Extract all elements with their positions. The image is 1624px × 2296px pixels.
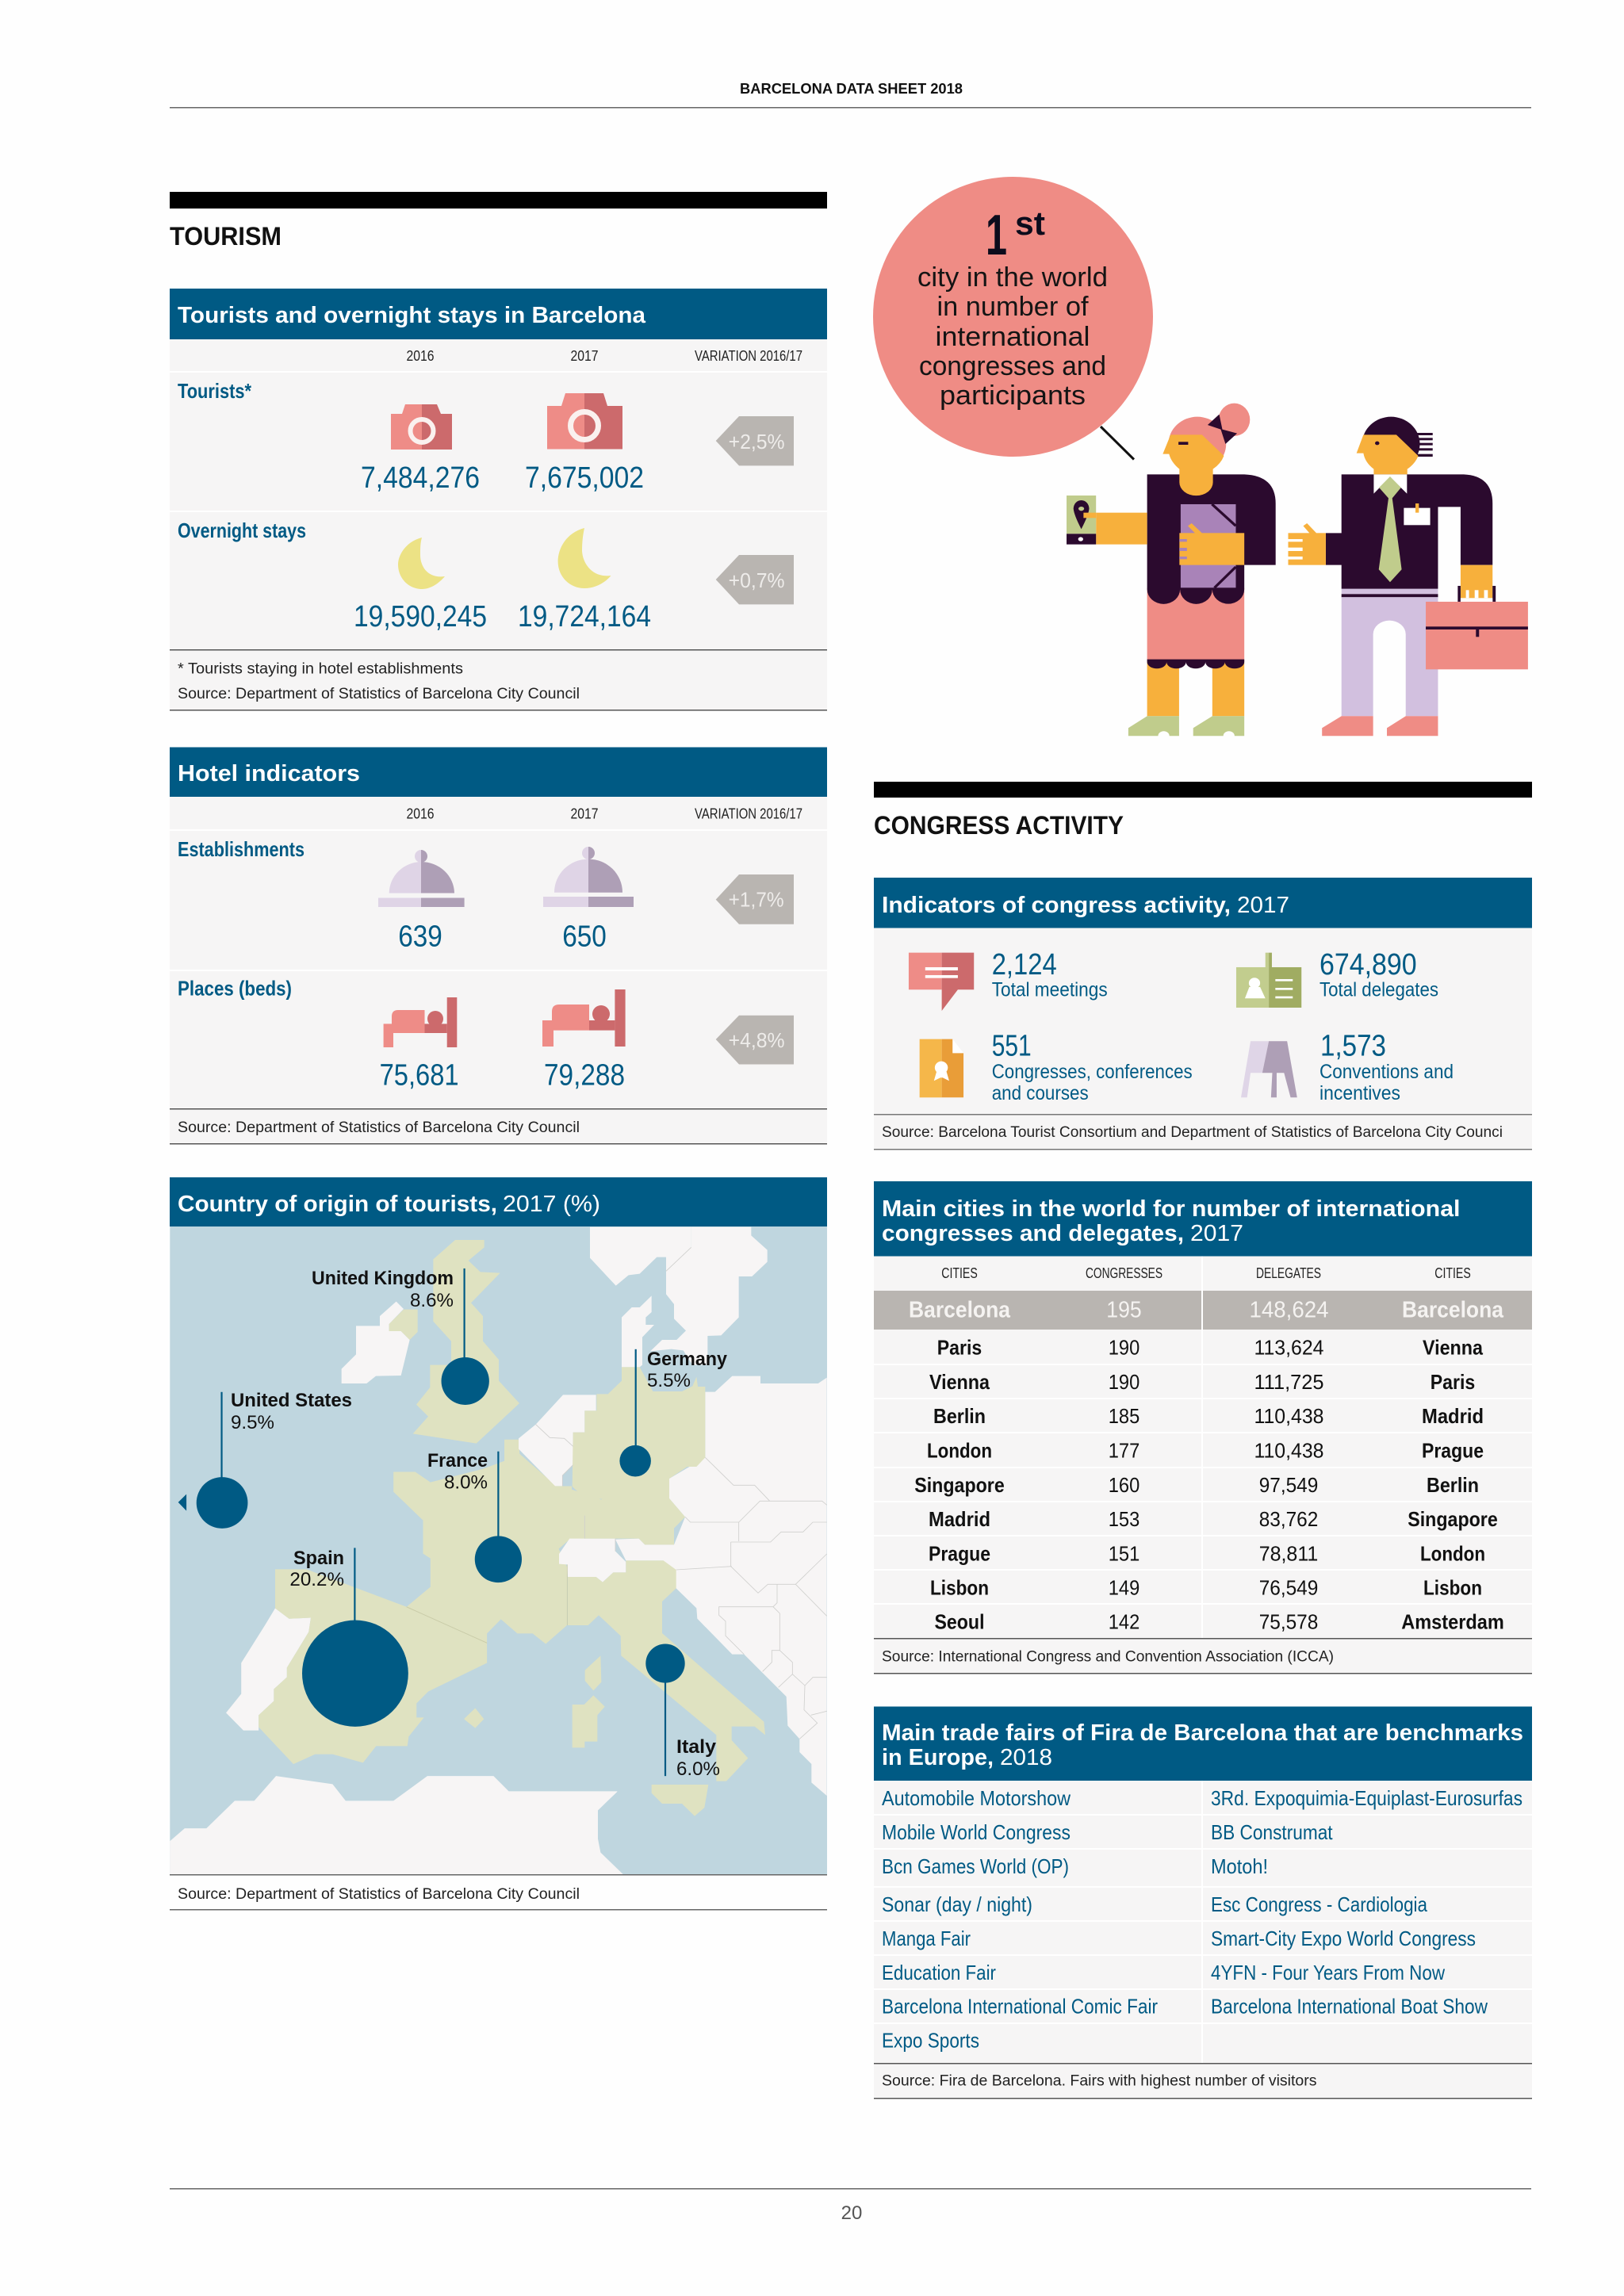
trade fair list: left column: Mobile World Congress xyxy=(882,1820,1071,1844)
label: united kingdom: 8.6% xyxy=(410,1290,454,1311)
callout: 1st city in the world: in number of xyxy=(937,292,1089,322)
icon: document xyxy=(920,1039,963,1097)
marker: united kingdom xyxy=(442,1269,489,1405)
icon: bed 2017 xyxy=(542,989,626,1047)
column headers: VARIATION 2016/17 xyxy=(695,348,802,364)
table rows: Vienna xyxy=(929,1370,990,1394)
row: tourists: 7,484,276 xyxy=(361,461,480,495)
column headers xyxy=(406,806,802,821)
indicator: congresses, conferences and courses: 551 xyxy=(992,1029,1032,1062)
callout: 1st city in the world: 1 xyxy=(986,204,1007,267)
indicator: total delegates xyxy=(1236,948,1438,1008)
table rows: Amsterdam xyxy=(1401,1609,1504,1633)
trade fair list: left column: Expo Sports xyxy=(882,2028,979,2052)
table rows: 97,549 xyxy=(1259,1473,1318,1497)
table rows: 160 xyxy=(1109,1473,1139,1497)
table rows: Singapore xyxy=(1408,1507,1498,1531)
table rows: Berlin xyxy=(933,1404,986,1428)
marker: united states xyxy=(178,1392,247,1529)
table rows: Vienna xyxy=(1423,1335,1483,1359)
footnote and source: Source: Department of Statistics of Barcelona City Council xyxy=(178,686,580,702)
row: places (beds): Places (beds) xyxy=(178,977,292,1001)
label: italy: Italy xyxy=(676,1736,717,1758)
trade fair list: left column: Manga Fair xyxy=(882,1927,971,1950)
variation arrow: +1,7% xyxy=(729,888,784,912)
table column headers xyxy=(941,1265,1471,1281)
trade fair list: right column xyxy=(1211,1786,1522,2019)
column headers: 2017 xyxy=(571,806,598,821)
table highlight row: barcelona: Barcelona xyxy=(1402,1297,1504,1322)
row: places (beds): 75,681 xyxy=(380,1059,459,1093)
source: Source: Department of Statistics of Barcelona City Council xyxy=(178,1119,580,1136)
variation arrow xyxy=(716,555,794,604)
table column headers: CITIES xyxy=(941,1265,978,1281)
marker: italy xyxy=(645,1644,685,1776)
table rows xyxy=(914,1335,1504,1633)
label: germany xyxy=(647,1349,728,1391)
panel heading xyxy=(874,878,1532,928)
illustration: two congress delegates xyxy=(1067,404,1528,736)
section heading: tourism xyxy=(170,192,827,251)
panel heading xyxy=(170,747,827,797)
trade fair list: right column: Esc Congress - Cardiologia xyxy=(1211,1892,1427,1916)
indicator: total meetings: 2,124 xyxy=(992,948,1057,982)
table rows: Paris xyxy=(937,1335,982,1359)
panel: indicators of congress activity xyxy=(874,878,1532,1150)
source: Source: Barcelona Tourist Consortium and Department of Statistics of Barcelona City Counci xyxy=(882,1124,1503,1141)
trade fair list: right column: Motoh! xyxy=(1211,1854,1268,1878)
western Europe land xyxy=(170,1440,618,1874)
table highlight row: barcelona: 148,624 xyxy=(1250,1297,1329,1322)
label: united states: United States xyxy=(231,1390,352,1411)
footnote and source: * Tourists staying in hotel establishments xyxy=(178,661,463,677)
panel heading: Hotel indicators xyxy=(178,761,360,786)
row: places (beds): 79,288 xyxy=(544,1059,625,1093)
row: tourists: Tourists* xyxy=(178,379,252,403)
icon: moon 2017 xyxy=(558,528,611,588)
column headers: 2016 xyxy=(406,348,435,364)
panel heading xyxy=(170,1177,827,1226)
panel heading: Main trade fairs of Fira de Barcelona that are benchmarks xyxy=(882,1720,1523,1746)
indicator: congresses, conferences and courses: and courses xyxy=(992,1082,1089,1104)
table rows: Lisbon xyxy=(930,1576,989,1600)
indicator: conventions and incentives: Conventions and xyxy=(1320,1061,1454,1083)
label: france: France xyxy=(427,1450,488,1471)
indicator: total meetings: Total meetings xyxy=(992,978,1108,1001)
label: united states: 9.5% xyxy=(231,1412,274,1433)
indicator: congresses, conferences and courses: Congresses, conferences xyxy=(992,1061,1193,1083)
table column headers: DELEGATES xyxy=(1256,1265,1321,1281)
column headers: 2017 xyxy=(571,348,598,364)
callout: 1st city in the world xyxy=(873,177,1153,460)
label: italy xyxy=(676,1736,720,1780)
icon: bell 2017 xyxy=(543,847,634,907)
section heading: congress activity: CONGRESS ACTIVITY xyxy=(874,811,1124,840)
table rows: 76,549 xyxy=(1259,1576,1318,1600)
british isles land xyxy=(342,1240,519,1444)
indicator: total meetings xyxy=(909,948,1108,1011)
panel: hotel indicators xyxy=(170,747,827,1145)
figure: woman xyxy=(1067,404,1276,736)
map of Europe xyxy=(170,1226,827,1874)
panel heading: 2017 xyxy=(1237,893,1289,918)
column headers xyxy=(406,348,802,364)
row: overnight stays: 19,590,245 xyxy=(354,600,487,633)
table rows: 113,624 xyxy=(1254,1335,1324,1359)
table rows: 142 xyxy=(1109,1609,1139,1633)
panel heading: 2017 (%) xyxy=(503,1192,600,1217)
icon: camera 2016 xyxy=(391,404,452,450)
marker: france xyxy=(475,1452,522,1582)
table rows: 149 xyxy=(1109,1576,1139,1600)
table column headers: CONGRESSES xyxy=(1086,1265,1162,1281)
table rows: 78,811 xyxy=(1259,1541,1318,1565)
label: germany: Germany xyxy=(647,1349,728,1370)
table rows: Paris xyxy=(1431,1370,1475,1394)
source: Source: Department of Statistics of Barcelona City Council xyxy=(178,1886,580,1903)
trade fair list: left column: Sonar (day / night) xyxy=(882,1892,1032,1916)
indicator: conventions and incentives xyxy=(1241,1029,1454,1104)
panel heading xyxy=(170,289,827,339)
row: establishments: 639 xyxy=(398,920,442,953)
callout: 1st city in the world: city in the world xyxy=(917,262,1108,293)
panel: country of origin map xyxy=(170,1177,827,1911)
table rows: 151 xyxy=(1109,1541,1139,1565)
label: united states xyxy=(231,1390,352,1433)
variation arrow: +0,7% xyxy=(729,568,785,592)
table rows: Berlin xyxy=(1427,1473,1479,1497)
marker: spain xyxy=(302,1548,408,1727)
panel heading: Tourists and overnight stays in Barcelona xyxy=(178,303,646,328)
source: Source: International Congress and Convention Association (ICCA) xyxy=(882,1649,1334,1665)
section heading: congress activity xyxy=(874,782,1532,840)
column headers: VARIATION 2016/17 xyxy=(695,806,802,821)
panel heading: congresses and delegates, xyxy=(882,1221,1184,1246)
variation arrow xyxy=(716,874,794,924)
table rows: 190 xyxy=(1109,1370,1139,1394)
indicator: conventions and incentives: incentives xyxy=(1320,1082,1400,1104)
table rows: Prague xyxy=(1422,1438,1484,1462)
panel heading: 2017 xyxy=(1190,1221,1243,1246)
table rows: 190 xyxy=(1109,1335,1139,1359)
figure: man xyxy=(1288,417,1528,736)
variation arrow: +4,8% xyxy=(729,1028,785,1052)
table rows: 185 xyxy=(1109,1404,1139,1428)
trade fair list: left column: Education Fair xyxy=(882,1961,996,1984)
table rows: 153 xyxy=(1109,1507,1139,1531)
icon: bed 2016 xyxy=(384,997,457,1047)
trade fair list: right column: 4YFN - Four Years From Now xyxy=(1211,1961,1445,1984)
indicator: total delegates: 674,890 xyxy=(1320,948,1417,982)
table rows: 75,578 xyxy=(1259,1609,1318,1633)
indicator: conventions and incentives: 1,573 xyxy=(1320,1029,1386,1062)
icon: display stand xyxy=(1241,1041,1297,1097)
icon: moon 2016 xyxy=(398,538,445,589)
trade fair list: right column: Barcelona International Boat Show xyxy=(1211,1995,1488,2019)
label: united kingdom xyxy=(312,1268,454,1311)
table highlight row: barcelona: Barcelona xyxy=(909,1297,1011,1322)
table rows: 110,438 xyxy=(1254,1404,1324,1428)
variation arrow xyxy=(716,416,794,465)
indicator: congresses, conferences and courses xyxy=(920,1029,1193,1104)
label: spain: Spain xyxy=(293,1548,344,1569)
row: tourists: 7,675,002 xyxy=(525,461,644,495)
icon: delegate badge xyxy=(1236,953,1301,1008)
panel heading: Country of origin of tourists, xyxy=(178,1192,497,1217)
label: spain: 20.2% xyxy=(289,1569,344,1590)
marker: germany xyxy=(619,1349,651,1476)
table rows: Singapore xyxy=(914,1473,1005,1497)
row: tourists xyxy=(178,379,794,495)
page header: BARCELONA DATA SHEET 2018 xyxy=(740,81,963,97)
panel heading xyxy=(874,1706,1532,1781)
icon: camera 2017 xyxy=(547,393,622,449)
table rows: London xyxy=(1420,1541,1485,1565)
table column headers: CITIES xyxy=(1434,1265,1471,1281)
icon: bell 2016 xyxy=(378,850,465,907)
table rows: 177 xyxy=(1109,1438,1139,1462)
northern and central Europe land xyxy=(519,1227,827,1796)
row: overnight stays: 19,724,164 xyxy=(518,600,651,633)
trade fair list: left column xyxy=(882,1786,1158,2052)
trade fair list: right column: BB Construmat xyxy=(1211,1820,1333,1844)
indicator: total delegates: Total delegates xyxy=(1320,978,1438,1001)
panel: tourists and overnight stays xyxy=(170,289,827,710)
panel heading: Indicators of congress activity, xyxy=(882,893,1231,918)
table rows: 111,725 xyxy=(1254,1370,1324,1394)
panel: main cities table xyxy=(874,1181,1532,1674)
table rows: Lisbon xyxy=(1423,1576,1482,1600)
table rows: London xyxy=(927,1438,992,1462)
trade fair list: right column: 3Rd. Expoquimia-Equiplast-Eurosurfas xyxy=(1211,1786,1522,1810)
row: establishments: 650 xyxy=(562,920,607,953)
table rows: Madrid xyxy=(1422,1404,1484,1428)
table rows: Seoul xyxy=(934,1609,985,1633)
label: italy: 6.0% xyxy=(676,1758,720,1780)
page footer: 20 xyxy=(841,2202,862,2224)
callout: 1st city in the world: st xyxy=(1015,205,1045,242)
trade fair list: left column: Barcelona International Comic Fair xyxy=(882,1995,1158,2019)
trade fair list: left column: Bcn Games World (OP) xyxy=(882,1854,1069,1878)
label: germany: 5.5% xyxy=(647,1370,691,1391)
callout: 1st city in the world: participants xyxy=(940,381,1086,411)
table rows: Madrid xyxy=(929,1507,990,1531)
table highlight row: barcelona: 195 xyxy=(1106,1297,1142,1322)
icon: speech bubble xyxy=(909,953,974,1011)
label: france xyxy=(427,1450,488,1494)
panel heading xyxy=(874,1181,1532,1256)
callout: 1st city in the world: congresses and xyxy=(919,351,1106,381)
section heading: tourism: TOURISM xyxy=(170,222,282,251)
column headers: 2016 xyxy=(406,806,435,821)
trade fair list: left column: Automobile Motorshow xyxy=(882,1786,1071,1810)
source: Source: Fira de Barcelona. Fairs with highest number of visitors xyxy=(882,2072,1316,2090)
variation arrow xyxy=(716,1016,794,1064)
table rows: 83,762 xyxy=(1259,1507,1318,1531)
italy and islands land xyxy=(508,1560,765,1874)
panel heading: in Europe, xyxy=(882,1745,994,1770)
row: overnight stays: Overnight stays xyxy=(178,519,306,542)
table rows: Prague xyxy=(929,1541,990,1565)
label: france: 8.0% xyxy=(444,1471,488,1494)
footnote and source xyxy=(178,661,580,702)
row: establishments xyxy=(178,837,794,953)
panel heading: Main cities in the world for number of international xyxy=(882,1196,1461,1222)
label: united kingdom: United Kingdom xyxy=(312,1268,454,1289)
panel: main trade fairs xyxy=(874,1706,1532,2099)
table highlight row: barcelona xyxy=(874,1291,1532,1330)
row: places (beds) xyxy=(178,977,794,1093)
row: overnight stays xyxy=(178,519,794,633)
variation arrow: +2,5% xyxy=(729,430,785,453)
table rows: 110,438 xyxy=(1254,1438,1324,1462)
label: spain xyxy=(289,1548,344,1590)
row: establishments: Establishments xyxy=(178,837,304,861)
callout: 1st city in the world: international xyxy=(936,322,1090,352)
panel heading: 2018 xyxy=(1000,1745,1052,1770)
trade fair list: right column: Smart-City Expo World Congress xyxy=(1211,1927,1476,1950)
